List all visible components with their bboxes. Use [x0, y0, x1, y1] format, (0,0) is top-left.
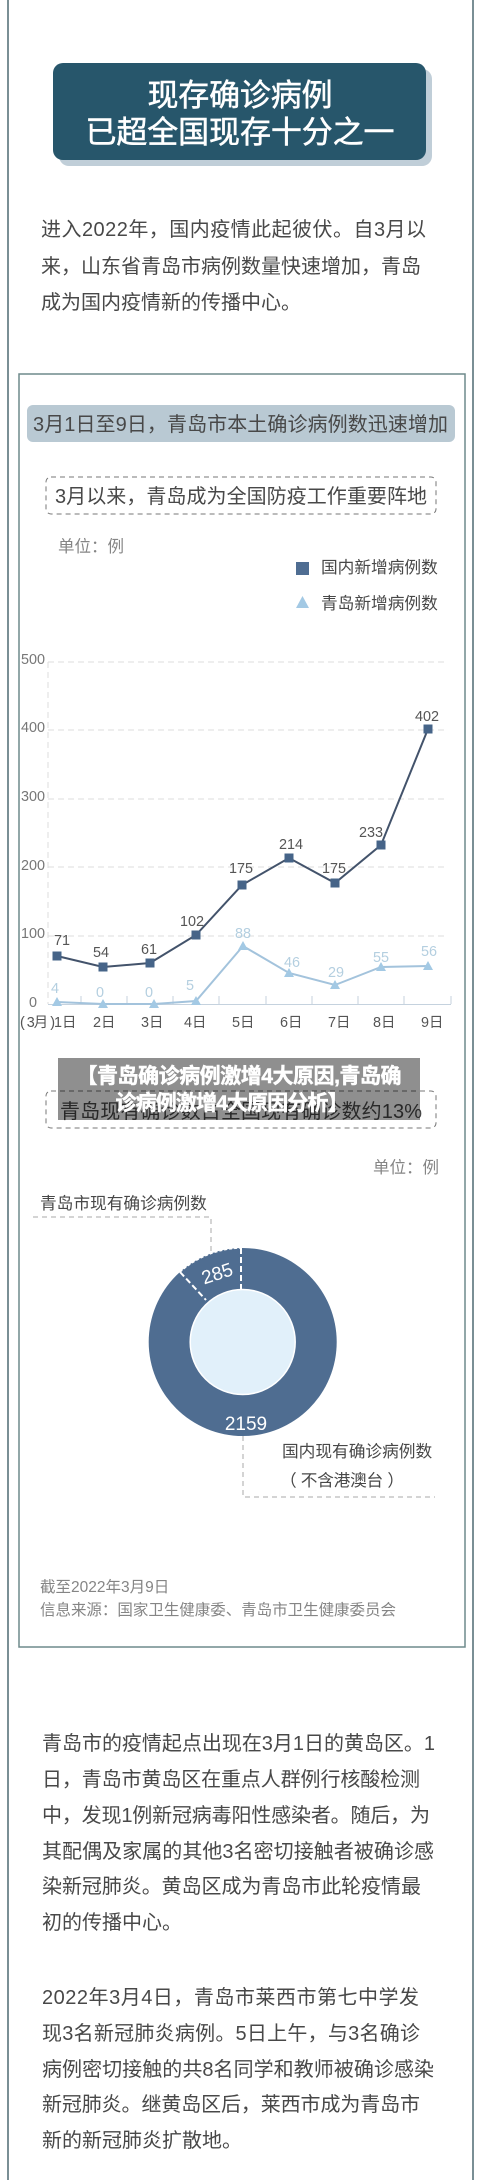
- panel: statistics box: [19, 374, 465, 1647]
- series: national new cases: 102: [180, 914, 204, 930]
- body paragraph: Huangdao: 其配偶及家属的其他3名密切接触者被确诊感: [42, 1840, 434, 1863]
- source note: 信息来源：国家卫生健康委、青岛市卫生健康委员会: [40, 1601, 396, 1619]
- donut label: Qingdao: [33, 1194, 211, 1253]
- callout: Qingdao important front: [46, 477, 436, 514]
- series: national new cases: 175: [229, 861, 253, 877]
- section heading bar: 3月1日至9日，青岛市本土确诊病例数迅速增加: [33, 413, 448, 436]
- y axis labels: 400: [21, 720, 45, 736]
- title banner: 已超全国现存十分之一: [86, 115, 394, 150]
- series: Qingdao new cases: 56: [421, 944, 437, 960]
- donut label: national: 国内现有确诊病例数: [282, 1442, 432, 1461]
- unit label for donut chart: 单位：例: [373, 1158, 439, 1177]
- y axis labels: 500: [21, 652, 45, 668]
- intro paragraph: 成为国内疫情新的传播中心。: [41, 291, 301, 314]
- unit label for line chart: 单位：例: [58, 537, 124, 556]
- y axis labels: 100: [21, 926, 45, 942]
- y axis labels: 300: [21, 789, 45, 805]
- callout: Qingdao share 13%: [46, 1091, 436, 1128]
- series: national new cases: 233: [359, 825, 383, 841]
- series: Qingdao new cases: 4: [51, 981, 59, 997]
- series: national new cases: [52, 709, 439, 972]
- y axis labels: [21, 652, 45, 1011]
- body paragraph: Laixi: 病例密切接触的共8名同学和教师被确诊感染: [42, 2058, 434, 2081]
- y axis labels: 200: [21, 858, 45, 874]
- chart legend: 国内新增病例数: [321, 558, 438, 577]
- x axis labels: 3日: [141, 1015, 163, 1031]
- series: national new cases: 402: [415, 709, 439, 725]
- watermark caption banner: 诊病例激增4大原因分析】: [116, 1092, 348, 1115]
- series: Qingdao new cases: 29: [328, 965, 344, 981]
- donut label: national: （ 不含港澳台 ）: [280, 1471, 404, 1490]
- x axis labels: [20, 1015, 443, 1031]
- body paragraph: Huangdao: 染新冠肺炎。黄岛区成为青岛市此轮疫情最: [42, 1875, 421, 1898]
- source note: 截至2022年3月9日: [40, 1578, 169, 1596]
- donut chart: 2159: [225, 1414, 267, 1435]
- callout: Qingdao important front: 3月以来，青岛成为全国防疫工作重要阵地: [55, 485, 427, 508]
- donut label: national: [243, 1436, 435, 1497]
- title banner: [53, 63, 432, 166]
- series: Qingdao new cases: 55: [373, 950, 389, 966]
- chart legend: [296, 558, 438, 613]
- series: Qingdao new cases: 5: [186, 978, 194, 994]
- series: Qingdao new cases: 88: [235, 926, 251, 942]
- donut chart: 285: [199, 1260, 236, 1289]
- x axis labels: 1日: [54, 1015, 76, 1031]
- body paragraph: Huangdao: [42, 1732, 435, 1934]
- donut label: Qingdao: 青岛市现有确诊病例数: [40, 1194, 207, 1213]
- series: Qingdao new cases: 0: [96, 985, 104, 1001]
- body paragraph: Huangdao: 中，发现1例新冠病毒阳性感染者。随后，为: [42, 1804, 430, 1827]
- watermark caption banner: [58, 1058, 420, 1120]
- x axis labels: 2日: [93, 1015, 115, 1031]
- intro paragraph: [41, 218, 426, 314]
- y axis labels: 0: [29, 995, 37, 1011]
- series: national new cases: 214: [279, 837, 303, 853]
- intro paragraph: 进入2022年，国内疫情此起彼伏。自3月以: [41, 218, 426, 241]
- series: Qingdao new cases: [51, 926, 437, 1008]
- series: national new cases: 175: [322, 861, 346, 877]
- series: Qingdao new cases: 46: [284, 955, 300, 971]
- x axis labels: 4日: [184, 1015, 206, 1031]
- body paragraph: Laixi: 新冠肺炎。继黄岛区后，莱西市成为青岛市: [42, 2093, 420, 2116]
- body paragraph: Laixi: [42, 1986, 434, 2152]
- intro paragraph: 来，山东省青岛市病例数量快速增加，青岛: [41, 255, 421, 278]
- x axis labels: 6日: [280, 1015, 302, 1031]
- x axis labels: 7日: [328, 1015, 350, 1031]
- body paragraph: Laixi: 现3名新冠肺炎病例。5日上午，与3名确诊: [42, 2022, 420, 2045]
- body paragraph: Huangdao: 青岛市的疫情起点出现在3月1日的黄岛区。1: [42, 1732, 435, 1755]
- title banner: 现存确诊病例: [148, 78, 332, 113]
- watermark caption banner: 【青岛确诊病例激增4大原因,青岛确: [76, 1065, 402, 1088]
- x axis labels: 8日: [373, 1015, 395, 1031]
- donut chart: [149, 1248, 337, 1436]
- series: national new cases: 54: [93, 945, 109, 961]
- series: national new cases: 71: [54, 933, 70, 949]
- body paragraph: Huangdao: 初的传播中心。: [42, 1911, 182, 1934]
- body paragraph: Laixi: 新的新冠肺炎扩散地。: [42, 2129, 242, 2152]
- series: Qingdao new cases: 0: [145, 985, 153, 1001]
- x axis labels: ( 3月 ): [20, 1015, 55, 1031]
- x axis labels: 5日: [232, 1015, 254, 1031]
- x axis labels: 9日: [421, 1015, 443, 1031]
- section heading bar: [27, 405, 455, 442]
- source note: [40, 1578, 396, 1619]
- callout: Qingdao share 13%: 青岛现有确诊数占全国现有确诊数约13%: [60, 1100, 422, 1123]
- series: national new cases: 61: [141, 942, 157, 958]
- body paragraph: Laixi: 2022年3月4日，青岛市莱西市第七中学发: [42, 1986, 419, 2009]
- line chart: daily new cases: [20, 652, 451, 1031]
- body paragraph: Huangdao: 日，青岛市黄岛区在重点人群例行核酸检测: [42, 1768, 420, 1791]
- chart legend: 青岛新增病例数: [321, 594, 438, 613]
